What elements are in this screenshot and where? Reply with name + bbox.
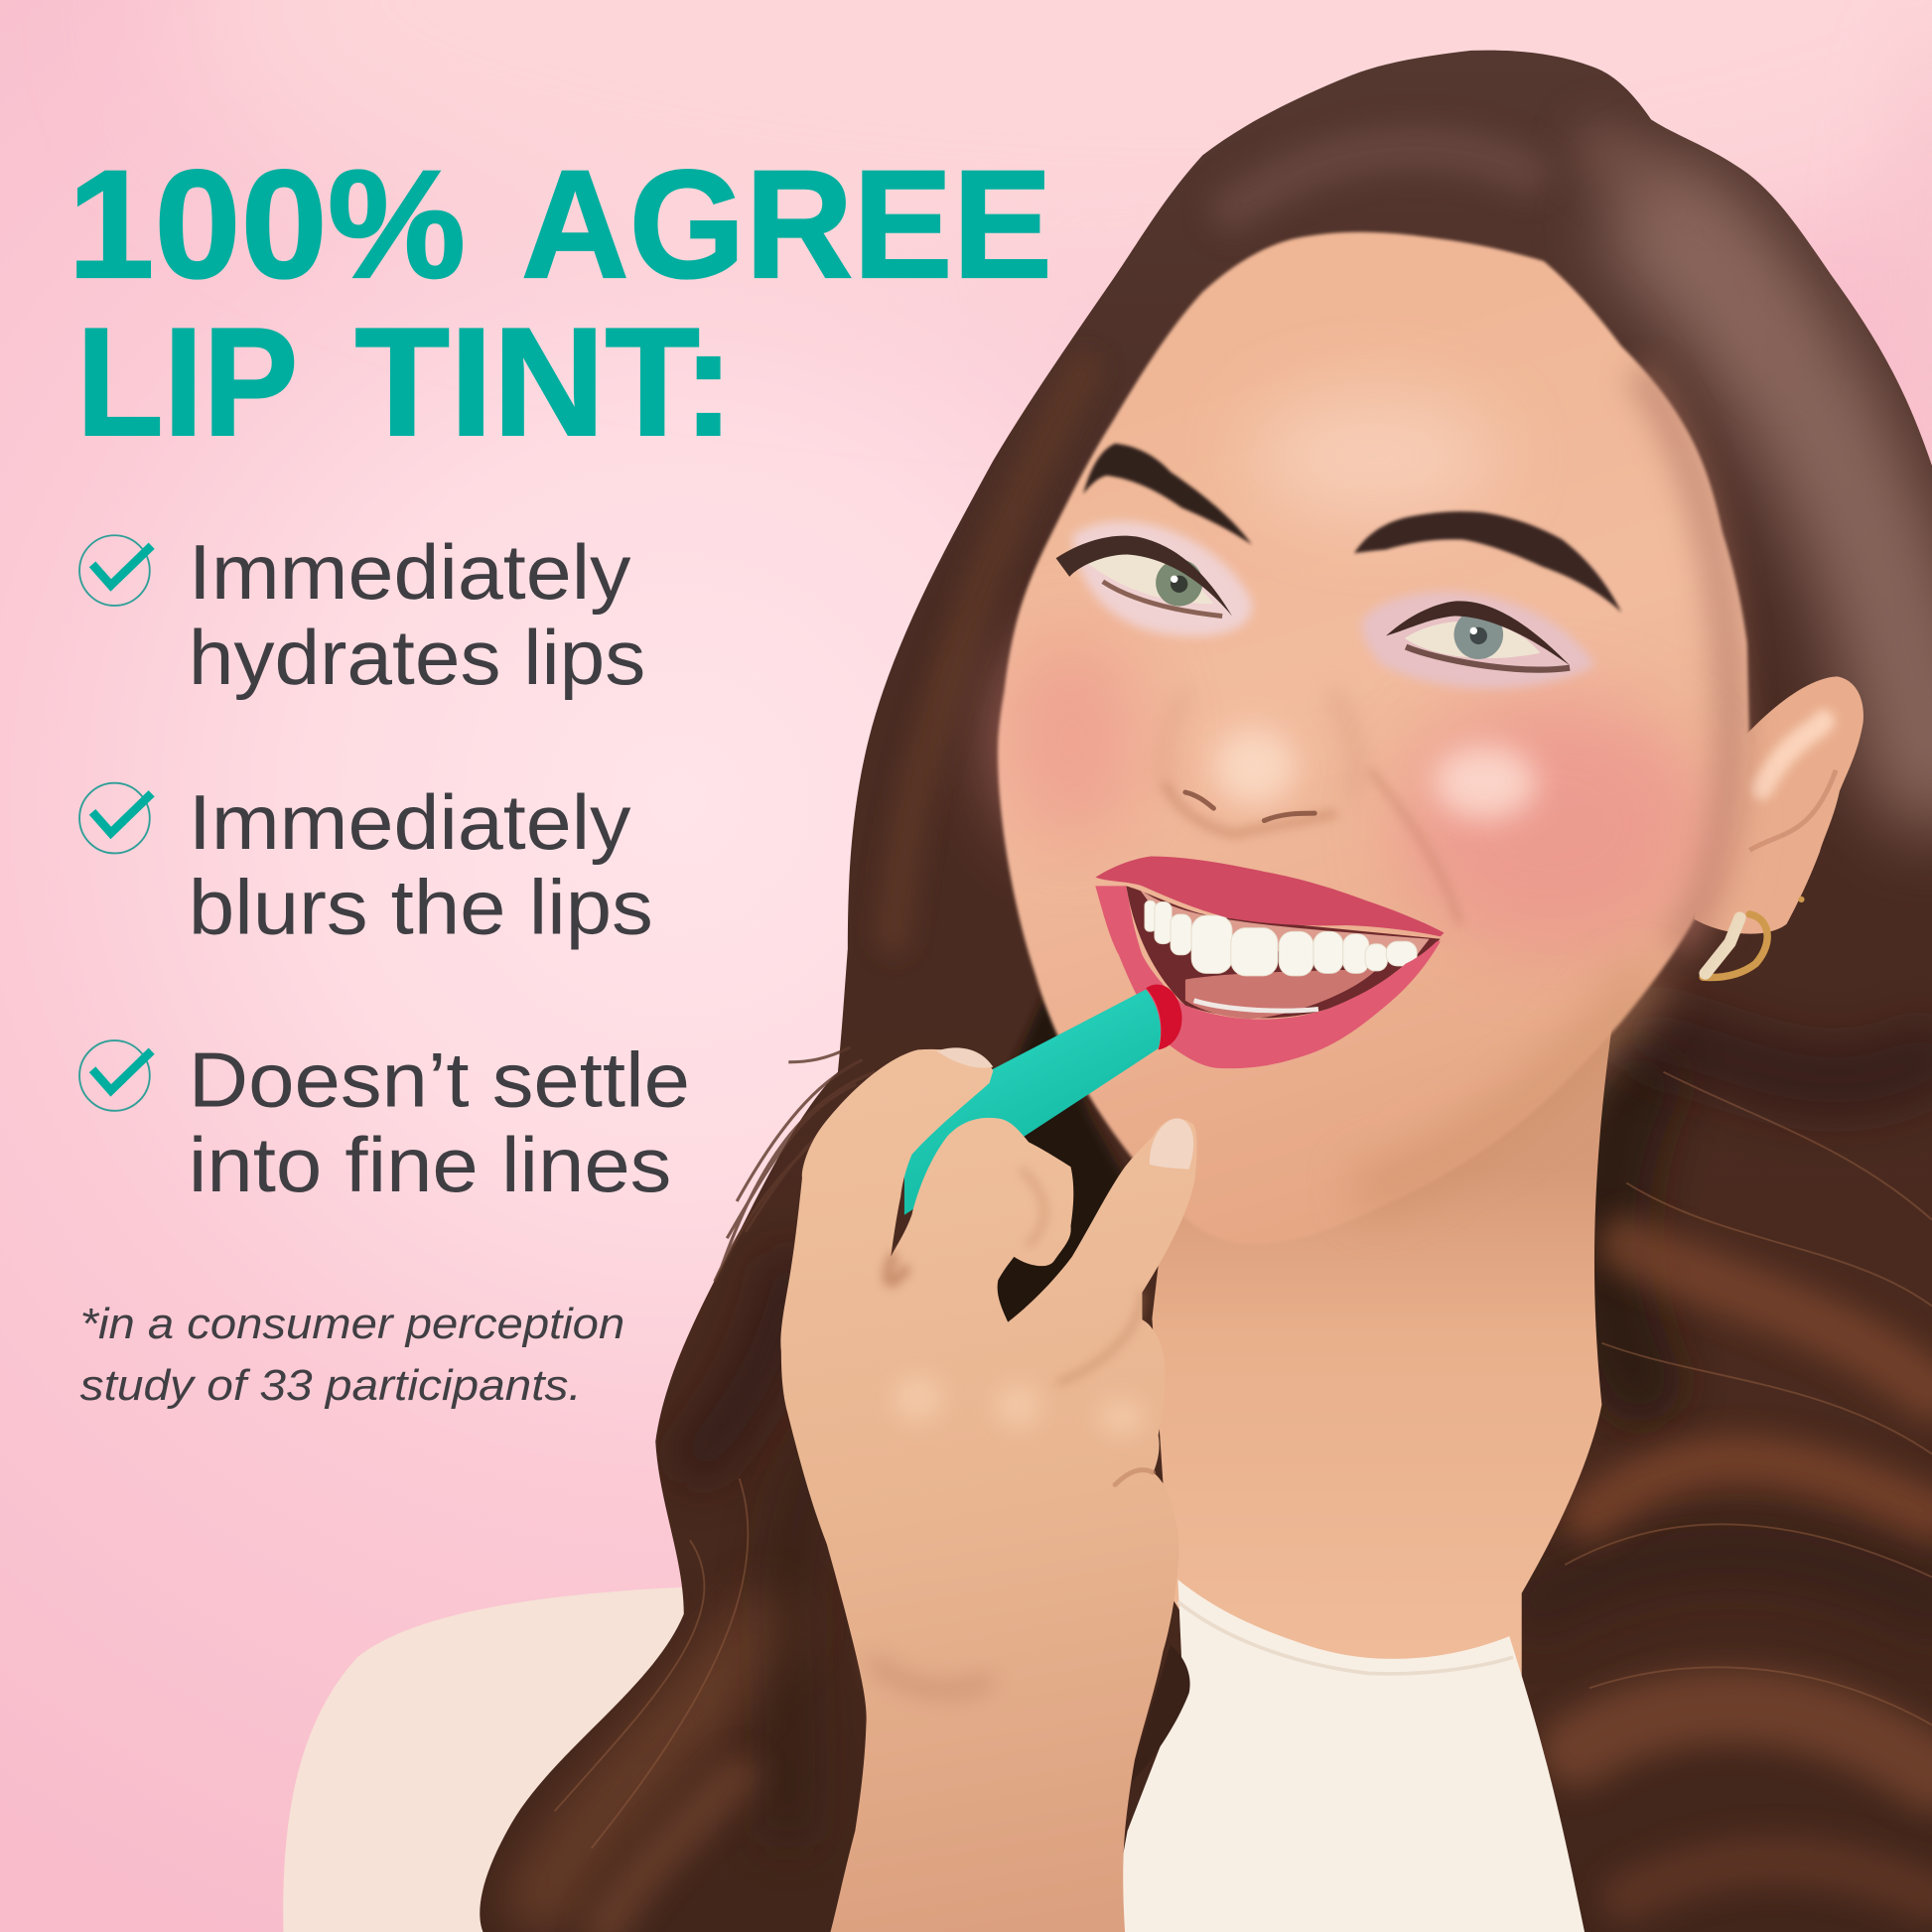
hand (780, 1047, 1197, 1932)
title (68, 138, 1052, 468)
eye: left (1056, 521, 1252, 636)
icon: check mark (79, 535, 152, 606)
mouth interior (1126, 886, 1441, 1018)
benefit text: Immediately (189, 528, 630, 616)
hair shading and highlights (542, 148, 1932, 1932)
blush left (998, 634, 1146, 844)
benefit text: into fine lines (189, 1121, 671, 1208)
eyebrow: right (1354, 511, 1621, 613)
benefit 2 (79, 778, 653, 951)
nose (1163, 690, 1357, 834)
benefit text (189, 778, 653, 951)
sweater: chest (1109, 1580, 1585, 1932)
gums (1140, 890, 1430, 955)
benefit text: Immediately (189, 778, 630, 866)
fingernail: pointing (1150, 1119, 1193, 1170)
upper lip (1095, 857, 1445, 936)
benefit 1 (79, 528, 645, 701)
icon: check mark (79, 783, 152, 853)
icon: check mark (79, 1040, 152, 1111)
benefit text: blurs the lips (189, 864, 653, 951)
jaw shading (1355, 973, 1651, 1195)
knuckle highlights (894, 1376, 1144, 1435)
neck (1152, 1011, 1614, 1694)
eye: right (1361, 592, 1595, 688)
hair wisps (715, 1047, 875, 1282)
benefit 3 (79, 1035, 690, 1208)
benefit text: Doesn’t settle (189, 1035, 690, 1123)
footnote: study of 33 participants. (80, 1362, 582, 1410)
fine hair strands (554, 1072, 1932, 1849)
title: TINT: (354, 296, 735, 468)
lip tint stick (904, 985, 1182, 1215)
tongue (1185, 968, 1378, 1019)
title: AGREE (521, 138, 1052, 310)
title: 100% (68, 138, 466, 310)
lips and smile (1095, 857, 1445, 1068)
sweater: shoulder (283, 1587, 863, 1932)
hair (469, 37, 1932, 1932)
lower lip (1095, 886, 1441, 1068)
right temple shadow (1639, 369, 1731, 949)
smile lines (1370, 770, 1460, 924)
face (998, 232, 1749, 1244)
title: LIP (76, 296, 298, 468)
benefit text (189, 1035, 690, 1208)
fingernail: index (936, 1047, 993, 1068)
eyebrow: left (1083, 444, 1252, 545)
saliva highlight (1194, 1001, 1318, 1011)
cheek highlight (1433, 746, 1537, 819)
ear with earring (1694, 676, 1863, 977)
footnote (80, 1301, 624, 1410)
forehead highlight (1251, 394, 1497, 517)
blush right (1399, 696, 1707, 955)
teeth (1145, 900, 1417, 976)
footnote: *in a consumer perception (80, 1301, 624, 1348)
shadow behind fingers (961, 993, 1128, 1337)
wrist and knuckle shading (875, 1171, 1154, 1690)
benefit text (189, 528, 645, 701)
benefit text: hydrates lips (189, 614, 645, 701)
hair strand behind wrist (1128, 1645, 1190, 1787)
